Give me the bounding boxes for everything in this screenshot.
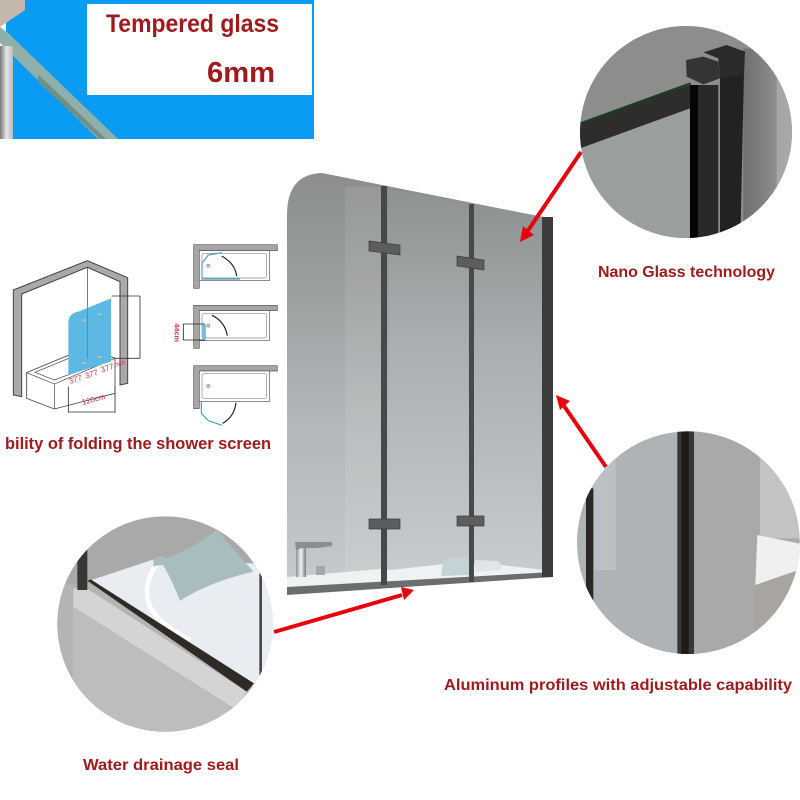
arrow: to glass pane	[520, 152, 581, 242]
diagram: isometric bath installation: 120cm	[81, 392, 107, 407]
panel: folding options diagrams	[5, 245, 277, 453]
diagram: isometric bath installation: mm	[113, 359, 127, 369]
lighter reflected wall panels	[345, 187, 384, 580]
detail circle: nano glass top corner	[580, 26, 792, 238]
heading: tempered glass: Tempered glass	[106, 10, 279, 38]
icon: glass pane edge	[0, 0, 118, 139]
caption: folding ability: bility of folding the shower screen	[5, 434, 271, 453]
bath and tap	[287, 542, 545, 590]
diagram: screen folded inward	[194, 245, 277, 288]
glass bottom seal	[287, 572, 553, 595]
label: nano glass technology: Nano Glass technology	[598, 264, 775, 281]
panel: folding shower screen product	[287, 173, 553, 595]
thickness value: 6mm	[207, 57, 275, 89]
diagram: screen folded outward	[194, 366, 277, 425]
panel: tempered glass	[0, 0, 314, 139]
label: aluminum profiles: Aluminum profiles with adjustable capability	[444, 677, 792, 694]
diagram: screen folded flat 44cm: 44cm	[173, 323, 182, 343]
hinges	[369, 241, 484, 529]
arrow: to bottom seal	[274, 587, 414, 632]
detail circle: water drainage seal	[57, 516, 273, 732]
diagram: isometric bath installation: 377	[84, 368, 100, 381]
black profile dividers	[381, 186, 387, 585]
diagram: isometric bath installation	[13, 261, 140, 413]
diagram: screen folded flat 44cm	[173, 305, 277, 348]
diagram: isometric bath installation: 377	[100, 362, 115, 375]
detail circle: aluminum profile	[570, 425, 800, 658]
arrow: to wall profile	[556, 395, 606, 467]
label: water drainage seal: Water drainage seal	[83, 757, 239, 774]
wall profile	[542, 217, 553, 577]
diagram: isometric bath installation: 377	[68, 373, 84, 386]
